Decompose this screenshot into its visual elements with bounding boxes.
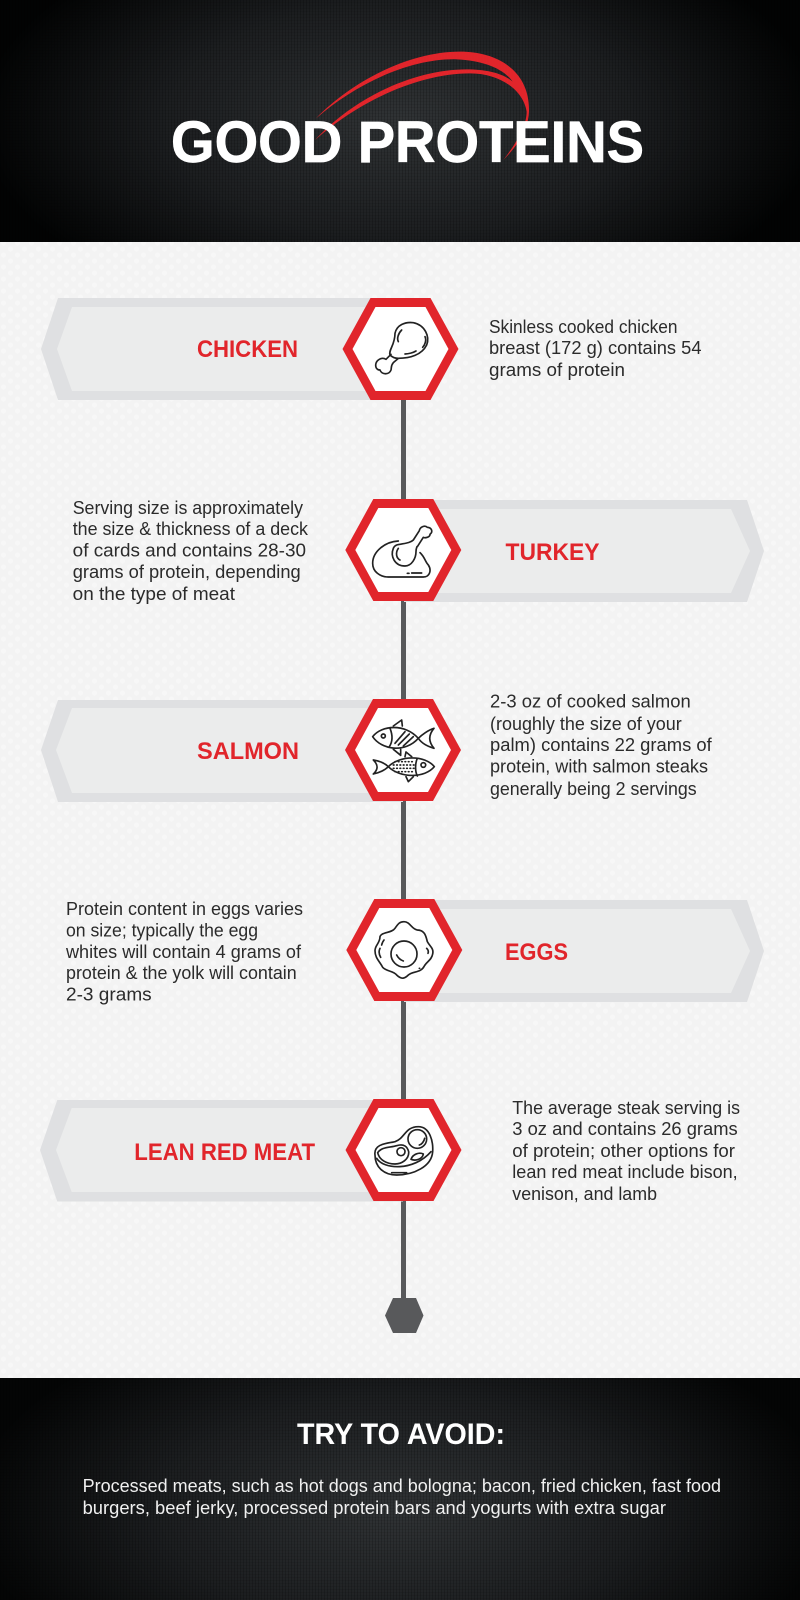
icon: roast turkey — [373, 526, 432, 577]
lean red meat description: The average steak serving is — [512, 1097, 740, 1118]
salmon label: SALMON — [197, 738, 299, 765]
eggs description: protein & the yolk will contain — [66, 962, 297, 983]
icon: red swoosh — [315, 52, 529, 160]
turkey description: of cards and contains 28-30 — [73, 540, 306, 561]
icon: timeline end hexagon — [385, 1298, 424, 1333]
chicken description: Skinless cooked chicken — [489, 316, 678, 337]
chicken description: grams of protein — [489, 359, 625, 380]
salmon description: (roughly the size of your — [490, 713, 682, 734]
eggs banner — [404, 900, 764, 1002]
panel: chicken — [41, 298, 702, 400]
panel: eggs — [65, 898, 764, 1005]
chicken label: CHICKEN — [197, 336, 298, 363]
lean red meat banner — [40, 1100, 403, 1202]
lean red meat description — [512, 1097, 740, 1204]
turkey description: on the type of meat — [73, 583, 235, 604]
eggs label: EGGS — [505, 939, 568, 966]
eggs description: whites will contain 4 grams of — [65, 941, 302, 962]
icon: fried egg — [375, 922, 433, 978]
lean red meat label: LEAN RED MEAT — [134, 1139, 315, 1166]
turkey description: grams of protein, depending — [73, 561, 301, 582]
chicken description — [489, 316, 702, 380]
turkey label: TURKEY — [506, 539, 600, 566]
footer background — [0, 1378, 800, 1600]
panel: lean red meat — [40, 1097, 740, 1204]
panel: salmon — [41, 691, 713, 802]
chicken hexagon — [342, 298, 458, 400]
eggs description — [65, 898, 303, 1005]
panel: turkey — [73, 497, 764, 604]
icon: steak — [375, 1127, 433, 1175]
eggs hexagon — [346, 899, 462, 1001]
icon: two fish — [373, 720, 434, 782]
turkey banner — [404, 500, 764, 602]
turkey description: the size & thickness of a deck — [73, 518, 309, 539]
lean red meat description: 3 oz and contains 26 grams — [512, 1118, 738, 1139]
footer heading: TRY TO AVOID: — [297, 1418, 505, 1451]
eggs description: 2-3 grams — [66, 984, 152, 1005]
salmon description: palm) contains 22 grams of — [490, 734, 713, 755]
footer text: burgers, beef jerky, processed protein bars and yogurts with extra sugar — [83, 1497, 666, 1518]
lean red meat description: venison, and lamb — [512, 1183, 657, 1204]
salmon description: protein, with salmon steaks — [490, 756, 708, 777]
panel: header background — [0, 0, 800, 242]
turkey description: Serving size is approximately — [73, 497, 304, 518]
salmon description — [490, 691, 713, 799]
timeline line — [401, 395, 406, 1305]
eggs description: on size; typically the egg — [66, 920, 258, 941]
panel: light background — [0, 242, 800, 1378]
salmon hexagon — [345, 699, 461, 801]
turkey description — [73, 497, 309, 604]
icon: chicken drumstick — [376, 322, 428, 374]
turkey hexagon — [345, 499, 461, 601]
salmon description: 2-3 oz of cooked salmon — [490, 691, 691, 712]
chicken description: breast (172 g) contains 54 — [489, 337, 702, 358]
eggs description: Protein content in eggs varies — [66, 898, 303, 919]
lean red meat description: lean red meat include bison, — [512, 1161, 738, 1182]
salmon banner — [41, 700, 403, 802]
panel: try to avoid footer — [0, 1378, 800, 1600]
lean red meat description: of protein; other options for — [512, 1140, 735, 1161]
footer text — [83, 1475, 721, 1518]
lean red meat hexagon — [346, 1099, 462, 1201]
title: GOOD PROTEINS — [171, 110, 644, 175]
salmon description: generally being 2 servings — [490, 778, 697, 799]
chicken banner — [41, 298, 400, 400]
footer text: Processed meats, such as hot dogs and bologna; bacon, fried chicken, fast food — [83, 1475, 721, 1496]
